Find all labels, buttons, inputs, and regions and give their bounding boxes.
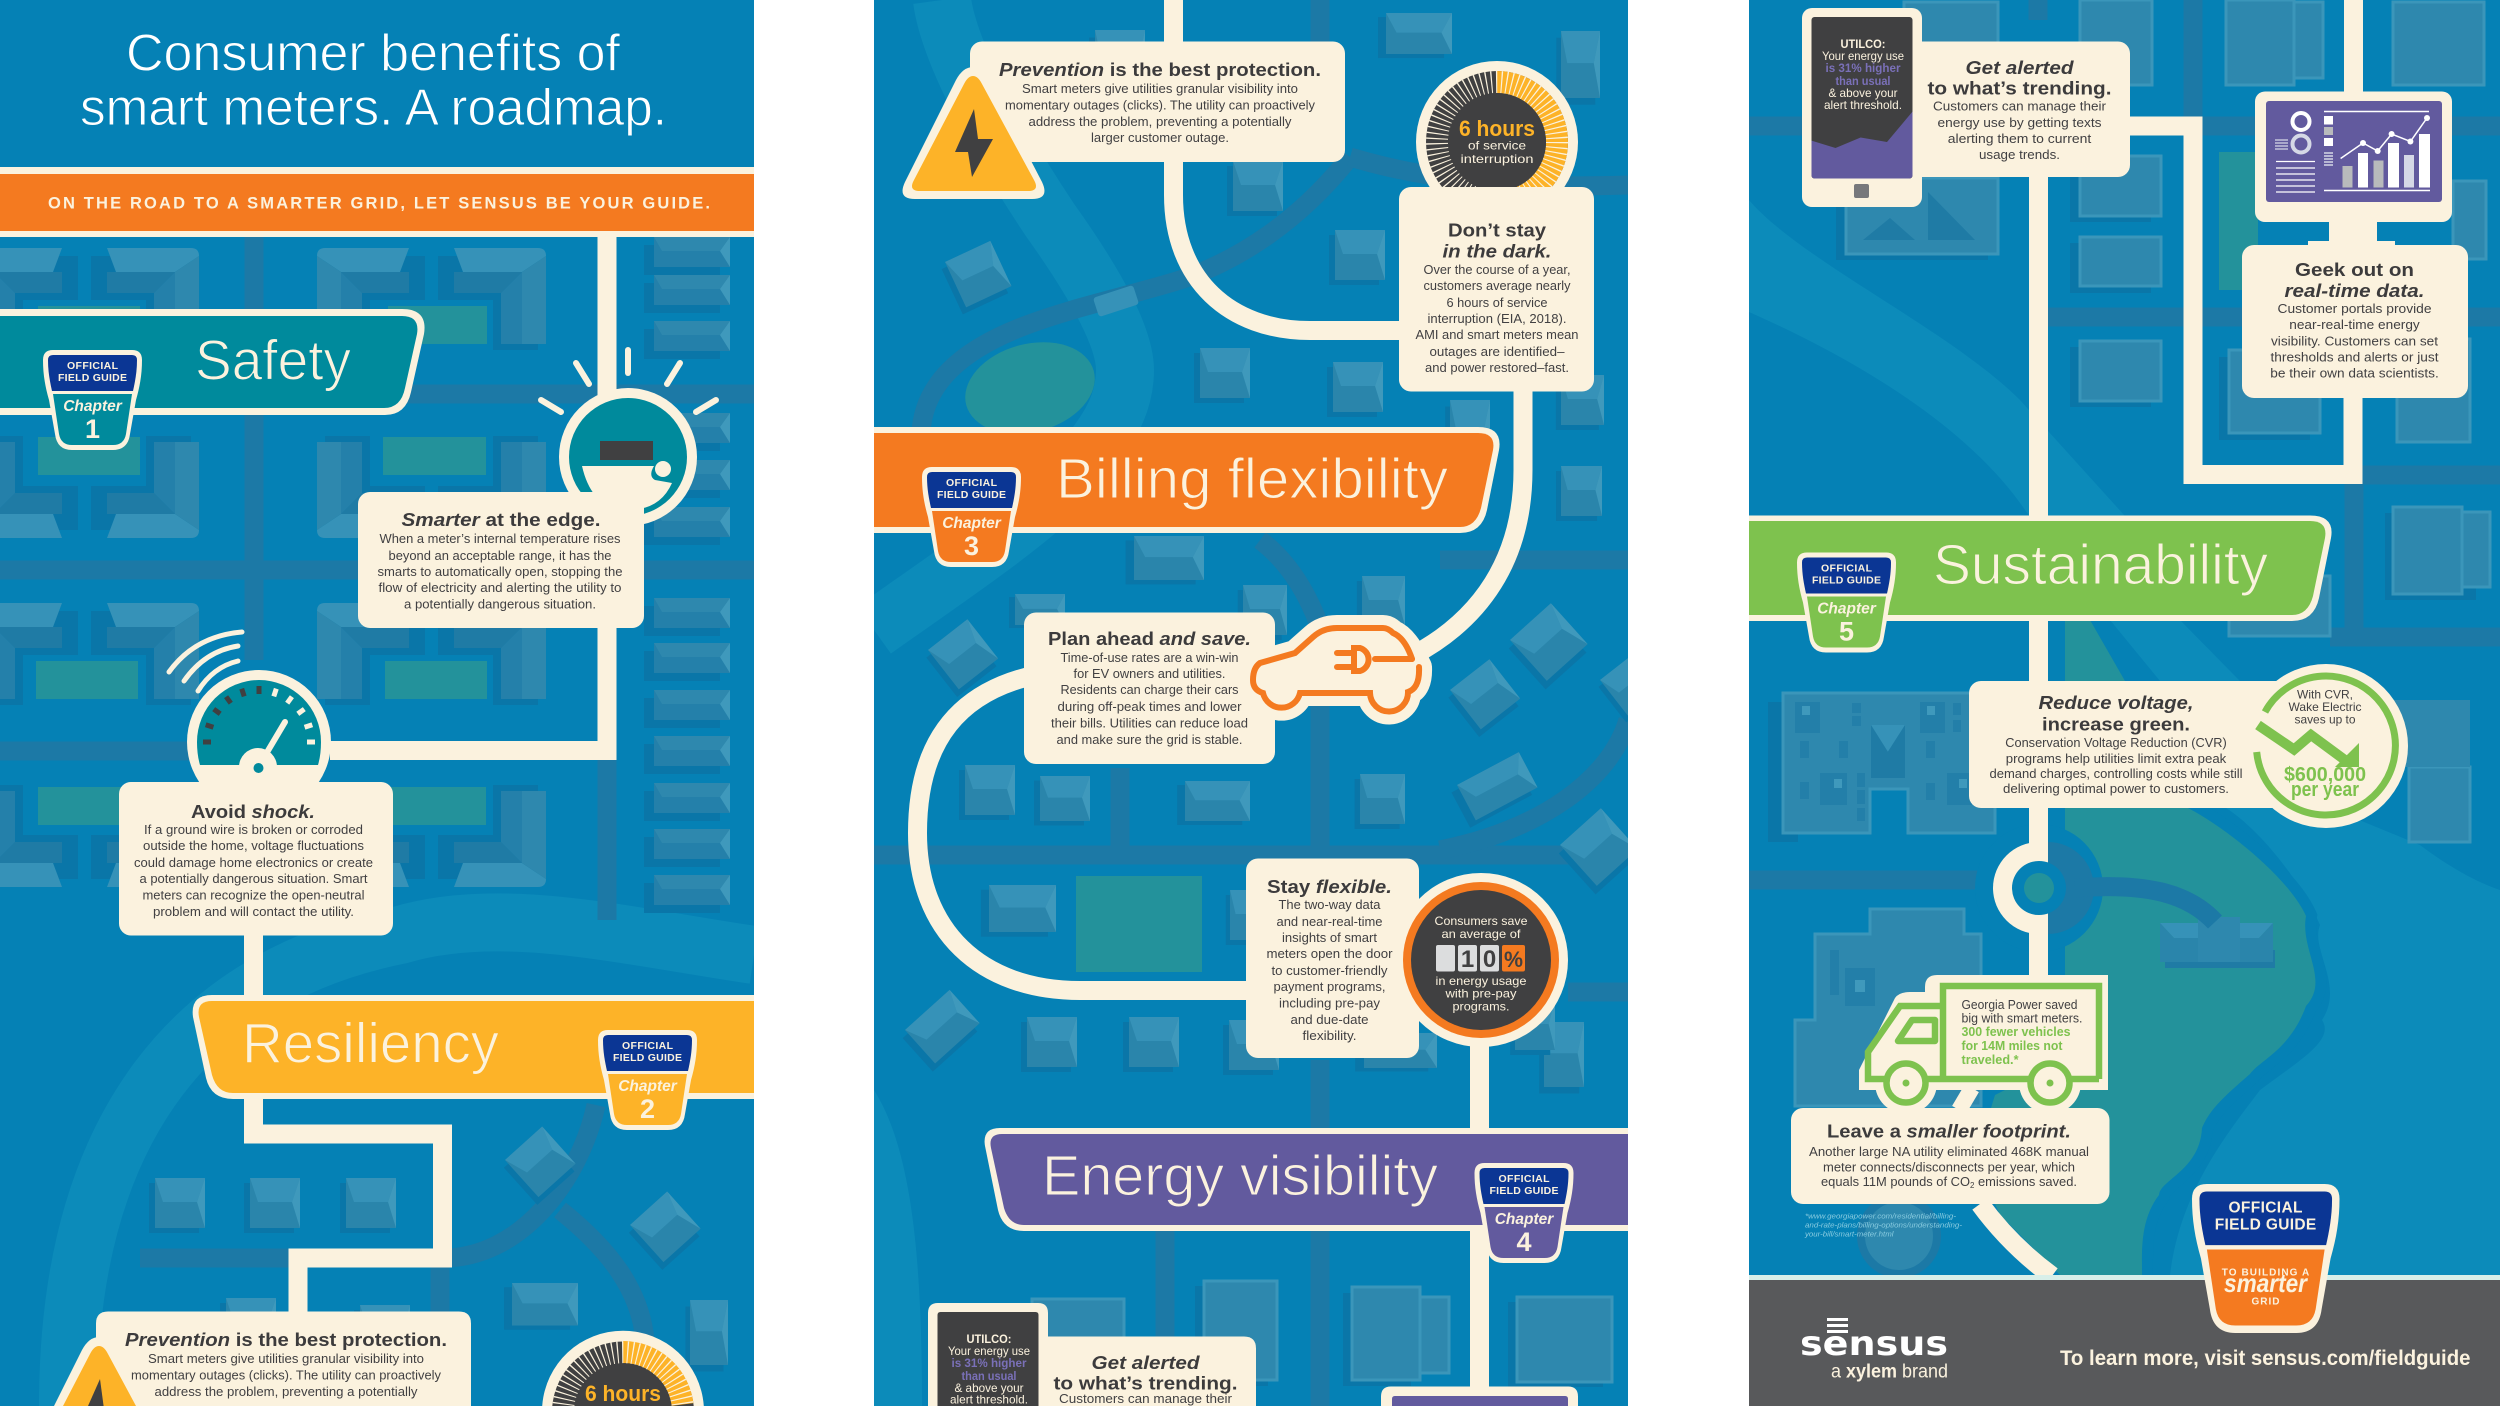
- card: Stay flexible: and due-date: [1290, 1012, 1368, 1027]
- icon: 10 percent savings counter: %: [1504, 947, 1523, 972]
- card: Don't stay in the dark: outages are identified–: [1430, 344, 1565, 359]
- card: Geek out on real-time data: Customer portals provide: [2278, 301, 2432, 316]
- banner: Resiliency: Resiliency: [242, 1012, 499, 1076]
- icon: 10 percent savings counter: programs.: [1452, 1000, 1510, 1014]
- panel: left column, title and chapters 1-2: [0, 0, 754, 1406]
- card: Prevention is the best protection: Prevention is the best protection.: [999, 59, 1321, 80]
- card: Geek out on real-time data: be their own data scientists.: [2270, 366, 2439, 380]
- card and phone: Get alerted to what's trending: [1802, 8, 2130, 207]
- card and phone: Get alerted (continues on next column): Customers can manage their: [1059, 1391, 1233, 1406]
- card: Smarter at the edge: a potentially dangerous situation.: [404, 596, 596, 612]
- footnote: [1804, 1212, 1963, 1238]
- banner: Sustainability: [1749, 516, 2332, 621]
- banner: Energy visibility: [985, 1128, 1628, 1231]
- card: Geek out on real-time data: Geek out on: [2295, 259, 2414, 280]
- chapter 1 shield: [43, 350, 142, 450]
- card: Prevention is the best protection: Smart meters give utilities granular visibility into: [1022, 81, 1298, 96]
- banner: Safety: Safety: [195, 328, 351, 392]
- icon: 10 percent savings counter: in energy usage: [1436, 974, 1527, 988]
- card: Avoid shock: could damage home electronics or create: [134, 855, 373, 870]
- card: Prevention (continues on next column): [54, 1312, 471, 1406]
- icon: 6 hours dial (continues on next column): [542, 1331, 704, 1406]
- card and phone: Get alerted (continues on next column): is 31% higher: [952, 1356, 1027, 1370]
- chapter 2 shield: OFFICIAL: [622, 1040, 674, 1052]
- card: Smarter at the edge: smarts to automatically open, stopping the: [378, 564, 622, 579]
- card: Stay flexible: payment programs,: [1274, 979, 1386, 994]
- panel: middle column, chapters 3-4: [874, 0, 1666, 1406]
- icon: phone with utility alert: alert threshold.: [1824, 98, 1902, 112]
- title: Consumer benefits of: [126, 24, 621, 82]
- icon: truck with Georgia Power callout: Georgia Power saved: [1962, 998, 2078, 1012]
- icon: CVR savings circle with down arrow: $600,000: [2284, 764, 2366, 786]
- card: Don't stay in the dark: customers average nearly: [1424, 278, 1571, 293]
- card: Don't stay in the dark: in the dark.: [1442, 240, 1552, 262]
- card: Plan ahead and save: [1024, 612, 1275, 764]
- footer bar: [1749, 1275, 2500, 1406]
- chapter 2 shield: FIELD GUIDE: [613, 1052, 682, 1064]
- park house: [2165, 950, 2275, 968]
- card: Don't stay in the dark: 6 hours of service: [1446, 295, 1548, 310]
- card: Reduce voltage, increase green: Reduce voltage,: [2038, 692, 2194, 713]
- footnote: *www.georgiapower.com/residential/billing-: [1805, 1212, 1957, 1220]
- card: Don't stay in the dark: interruption (EIA, 2018).: [1428, 311, 1566, 326]
- card: Plan ahead and save: for EV owners and utilities.: [1074, 666, 1226, 681]
- card: Smarter at the edge: When a meter’s internal temperature rises: [380, 531, 621, 546]
- large shield: official field guide to building a smarter grid: TO BUILDING A: [2222, 1268, 2309, 1278]
- card and phone: Get alerted (continues on next column): Your energy use: [948, 1344, 1030, 1358]
- card: Don't stay in the dark: Don’t stay: [1448, 220, 1547, 240]
- card and phone: Get alerted (continues on next column): [928, 1303, 1256, 1406]
- chapter 1 shield: OFFICIAL: [67, 360, 119, 372]
- footer call to action: To learn more, visit sensus.com/fieldguide: [2060, 1347, 2470, 1370]
- large shield: official field guide to building a smarter grid: [2192, 1184, 2340, 1333]
- large shield: official field guide to building a smarter grid: smarter: [2224, 1268, 2309, 1298]
- card and phone: Get alerted (continues on next column): UTILCO:: [966, 1332, 1012, 1346]
- map background: neighbourhood streets and houses: [0, 237, 754, 1406]
- card: Reduce voltage, increase green: delivering optimal power to customers.: [2003, 781, 2229, 796]
- card: Prevention is the best protection: larger customer outage.: [1091, 130, 1229, 145]
- card: Geek out on real-time data: thresholds and alerts or just: [2270, 350, 2439, 364]
- card: Avoid shock: problem and will contact the utility.: [153, 904, 354, 919]
- icon: truck with Georgia Power callout: big with smart meters.: [1962, 1012, 2082, 1026]
- buildings lower left: [1768, 702, 1798, 842]
- card: Plan ahead and save: their bills. Utilities can reduce load: [1051, 716, 1248, 730]
- chapter 1 shield: 1: [85, 414, 100, 444]
- card: Reduce voltage, increase green: programs help utilities limit extra peak: [2006, 751, 2227, 766]
- card: Don't stay in the dark: AMI and smart meters mean: [1416, 327, 1578, 342]
- card: Reduce voltage, increase green: Conservation Voltage Reduction (CVR): [2005, 735, 2227, 750]
- icon: 10 percent savings counter: an average of: [1442, 927, 1521, 941]
- card: Plan ahead and save: Residents can charge their cars: [1060, 682, 1239, 697]
- icon: 10 percent savings counter: 0: [1483, 946, 1496, 973]
- card: Stay flexible: insights of smart: [1282, 930, 1377, 945]
- card: Prevention is the best protection: address the problem, preventing a potentially: [1028, 114, 1292, 129]
- orange tagline band: [0, 167, 754, 237]
- large shield: official field guide to building a smarter grid: FIELD GUIDE: [2215, 1216, 2316, 1234]
- card: Leave a smaller footprint: 2: [1970, 1181, 1975, 1190]
- logo: sensus a xylem brand: sensus: [1800, 1324, 1948, 1364]
- card: Leave a smaller footprint: [1791, 1108, 2110, 1204]
- title: smart meters. A roadmap.: [80, 79, 667, 137]
- card: Stay flexible: Stay flexible.: [1267, 876, 1392, 897]
- icon: phone with utility alert: than usual: [1836, 74, 1890, 88]
- card: Smarter at the edge: Smarter at the edge.: [402, 509, 600, 530]
- icon: monitor with real-time data chart: [2255, 92, 2452, 250]
- chapter 2 shield: Chapter: [618, 1078, 678, 1095]
- card: Leave a smaller footprint: equals 11M pounds of CO: [1821, 1174, 1971, 1189]
- banner: Sustainability: Sustainability: [1933, 533, 2268, 597]
- road path: [918, 0, 1523, 1390]
- card: Avoid shock: If a ground wire is broken or corroded: [144, 822, 363, 837]
- chapter 3 shield: FIELD GUIDE: [937, 489, 1006, 501]
- logo: sensus a xylem brand: [1800, 1318, 1948, 1382]
- card: Avoid shock: outside the home, voltage fluctuations: [143, 838, 364, 853]
- card: Geek out on real-time data: near-real-time energy: [2289, 317, 2420, 332]
- icon: smart meter with rays: [541, 350, 716, 526]
- banner: Billing flexibility: [874, 427, 1500, 533]
- card and phone: Get alerted to what's trending: Get alerted: [1966, 57, 2074, 78]
- icon: phone with utility alert: & above your: [1828, 86, 1898, 100]
- roundabout: [1993, 842, 2215, 934]
- card: Prevention (continues on next column): Prevention is the best protection.: [125, 1329, 447, 1350]
- card: Leave a smaller footprint: emissions saved.: [1974, 1174, 2077, 1189]
- card: Stay flexible: flexibility.: [1302, 1028, 1356, 1043]
- icon: CVR savings circle with down arrow: saves up to: [2294, 712, 2356, 726]
- card and phone: Get alerted (continues on next column): than usual: [962, 1369, 1016, 1383]
- icon: electric car: [1253, 628, 1419, 711]
- chapter 5 shield: [1797, 552, 1896, 652]
- card: Geek out on real-time data: [2242, 245, 2468, 398]
- card and phone: Get alerted (continues on next column): alert threshold.: [950, 1392, 1028, 1406]
- card: Avoid shock: a potentially dangerous situation. Smart: [140, 871, 368, 886]
- banner: Resiliency: [193, 995, 754, 1099]
- chapter 3 shield: Chapter: [942, 515, 1002, 532]
- chapter 2 shield: 2: [640, 1094, 655, 1124]
- card: Reduce voltage, increase green: increase green.: [2042, 714, 2190, 734]
- card: Geek out on real-time data: visibility. Customers can set: [2271, 334, 2438, 348]
- card: Prevention (continues on next column): address the problem, preventing a potentially: [154, 1384, 418, 1399]
- icon: phone with utility alert: is 31% higher: [1826, 61, 1901, 75]
- chapter 1 shield: Chapter: [63, 398, 123, 415]
- large shield: official field guide to building a smarter grid: OFFICIAL: [2228, 1200, 2302, 1216]
- chapter 2 shield: [598, 1030, 697, 1130]
- icon: 6 hours of service interruption dial: 6 hours: [1459, 116, 1535, 141]
- footnote: and-rate-plans/billing-options/understanding-: [1805, 1220, 1963, 1230]
- card: Stay flexible: The two-way data: [1278, 897, 1381, 912]
- card: Stay flexible: [1246, 858, 1419, 1058]
- icon: 10 percent savings counter: 1: [1461, 946, 1474, 973]
- card: Plan ahead and save: and make sure the grid is stable.: [1056, 732, 1242, 747]
- card: Don't stay in the dark: Over the course of a year,: [1424, 262, 1570, 277]
- card: Reduce voltage, increase green: demand charges, controlling costs while still: [1990, 766, 2243, 781]
- icon: 6 hours of service interruption dial: of service: [1468, 138, 1526, 152]
- card: Stay flexible: including pre-pay: [1279, 996, 1380, 1010]
- card and phone: Get alerted to what's trending: energy use by getting texts: [1938, 115, 2102, 130]
- chapter 4 shield: OFFICIAL: [1498, 1173, 1550, 1185]
- monitor top (continues on next column): [1381, 1386, 1578, 1406]
- icon: CVR savings circle with down arrow: With CVR,: [2297, 688, 2353, 702]
- icon: 10 percent savings counter: with pre-pay: [1444, 986, 1516, 1000]
- card: Prevention is the best protection: momentary outages (clicks). The utility can proactively: [1005, 98, 1315, 112]
- map background: buildings, river and park: [1749, 0, 2500, 1275]
- chapter 4 shield: Chapter: [1495, 1211, 1554, 1228]
- card: Leave a smaller footprint: Leave a smaller footprint.: [1827, 1120, 2071, 1142]
- footnote: your-bill/smart-meter.html: [1804, 1230, 1894, 1238]
- card: Smarter at the edge: flow of electricity and alerting the utility to: [378, 580, 622, 595]
- icon: 10 percent savings counter: [1394, 873, 1568, 1047]
- icon: phone with utility alert: UTILCO:: [1840, 37, 1886, 51]
- large shield: official field guide to building a smarter grid: GRID: [2252, 1296, 2280, 1308]
- card: Don't stay in the dark: [1399, 187, 1594, 392]
- icon: CVR savings circle with down arrow: per year: [2291, 779, 2359, 801]
- icon: truck with Georgia Power callout: for 14M miles not: [1962, 1039, 2063, 1053]
- card: Smarter at the edge: [358, 492, 644, 628]
- icon: warning triangle: [903, 67, 1044, 199]
- card and phone: Get alerted to what's trending: to what’s trending.: [1928, 78, 2112, 98]
- card: Don't stay in the dark: and power restored–fast.: [1425, 360, 1569, 375]
- title: [82, 34, 662, 136]
- road path: [1959, 0, 2354, 1276]
- icon: truck with Georgia Power callout: traveled.*: [1962, 1053, 2019, 1067]
- icon: 6 hours of service interruption dial: interruption: [1460, 152, 1534, 166]
- icon: CVR savings circle with down arrow: [2244, 664, 2408, 828]
- icon: 10 percent savings counter: Consumers save: [1434, 914, 1528, 928]
- icon: CVR savings circle with down arrow: Wake Electric: [2288, 700, 2362, 714]
- chapter 4 shield: [1474, 1163, 1574, 1263]
- icon: voltage gauge with signal arcs: [166, 630, 331, 782]
- card: Reduce voltage, increase green: [1969, 681, 2309, 808]
- chapter 5 shield: OFFICIAL: [1821, 562, 1873, 574]
- orange tagline band: ON THE ROAD TO A SMARTER GRID, LET SENSUS BE YOUR GUIDE.: [48, 194, 710, 212]
- icon: truck with Georgia Power callout: 300 fewer vehicles: [1962, 1025, 2071, 1039]
- panel: right column, chapter 5 and footer: [1749, 0, 2500, 1406]
- chapter 3 shield: 3: [964, 531, 979, 561]
- card and phone: Get alerted to what's trending: usage trends.: [1979, 147, 2060, 162]
- card and phone: Get alerted (continues on next column): Get alerted: [1092, 1352, 1200, 1373]
- river and park: [2170, 808, 2500, 1275]
- card: Leave a smaller footprint: meter connects/disconnects per year, which: [1823, 1160, 2075, 1174]
- icon: phone with utility alert: [1802, 8, 1922, 207]
- card and phone: Get alerted (continues on next column): & above your: [954, 1381, 1024, 1395]
- road path: [254, 237, 607, 1320]
- icon: 6 hours dial (continues on next column): 6 hours: [585, 1381, 661, 1406]
- card: Plan ahead and save: during off-peak times and lower: [1058, 699, 1242, 714]
- card: Avoid shock: [119, 782, 393, 936]
- card: Smarter at the edge: beyond an acceptable range, it has the: [388, 548, 612, 563]
- banner: Safety: [0, 309, 425, 415]
- card: Leave a smaller footprint: Another large NA utility eliminated 468K manual: [1809, 1144, 2089, 1159]
- logo: sensus a xylem brand: a xylem brand: [1831, 1362, 1948, 1382]
- card: Geek out on real-time data: real-time data.: [2284, 280, 2424, 301]
- card: Plan ahead and save: Time-of-use rates are a win-win: [1060, 650, 1238, 665]
- card and phone: Get alerted to what's trending: alerting them to current: [1948, 131, 2092, 146]
- card: Stay flexible: to customer-friendly: [1272, 963, 1388, 978]
- chapter 3 shield: [922, 467, 1021, 567]
- chapter 3 shield: OFFICIAL: [946, 477, 998, 489]
- chapter 4 shield: FIELD GUIDE: [1490, 1185, 1558, 1197]
- map background: streets, houses and river: [874, 0, 1666, 1406]
- card: Plan ahead and save: Plan ahead and save.: [1048, 628, 1251, 649]
- card: Prevention (continues on next column): momentary outages (clicks). The utility can proactively: [131, 1368, 441, 1382]
- banner: Energy visibility: Energy visibility: [1042, 1144, 1439, 1208]
- card: Avoid shock: Avoid shock.: [191, 801, 315, 822]
- chapter 5 shield: Chapter: [1817, 600, 1877, 618]
- card: Prevention is the best protection: [903, 42, 1345, 199]
- chapter 4 shield: 4: [1516, 1227, 1532, 1257]
- card and phone: Get alerted (continues on next column): to what’s trending.: [1054, 1372, 1238, 1394]
- icon: truck with Georgia Power callout: [1859, 975, 2108, 1114]
- banner: Billing flexibility: Billing flexibility: [1056, 447, 1449, 511]
- chapter 1 shield: FIELD GUIDE: [58, 372, 127, 384]
- card: Stay flexible: and near-real-time: [1276, 914, 1382, 929]
- card: Avoid shock: meters can recognize the open-neutral: [142, 888, 365, 902]
- card: Prevention (continues on next column): Smart meters give utilities granular visibility into: [148, 1351, 424, 1366]
- card and phone: Get alerted to what's trending: Customers can manage their: [1933, 98, 2107, 114]
- chapter 5 shield: FIELD GUIDE: [1812, 574, 1881, 586]
- icon: 6 hours of service interruption dial: [1416, 61, 1578, 187]
- icon: phone with utility alert: Your energy use: [1822, 49, 1904, 63]
- card: Stay flexible: meters open the door: [1266, 946, 1393, 961]
- chapter 5 shield: 5: [1839, 616, 1854, 646]
